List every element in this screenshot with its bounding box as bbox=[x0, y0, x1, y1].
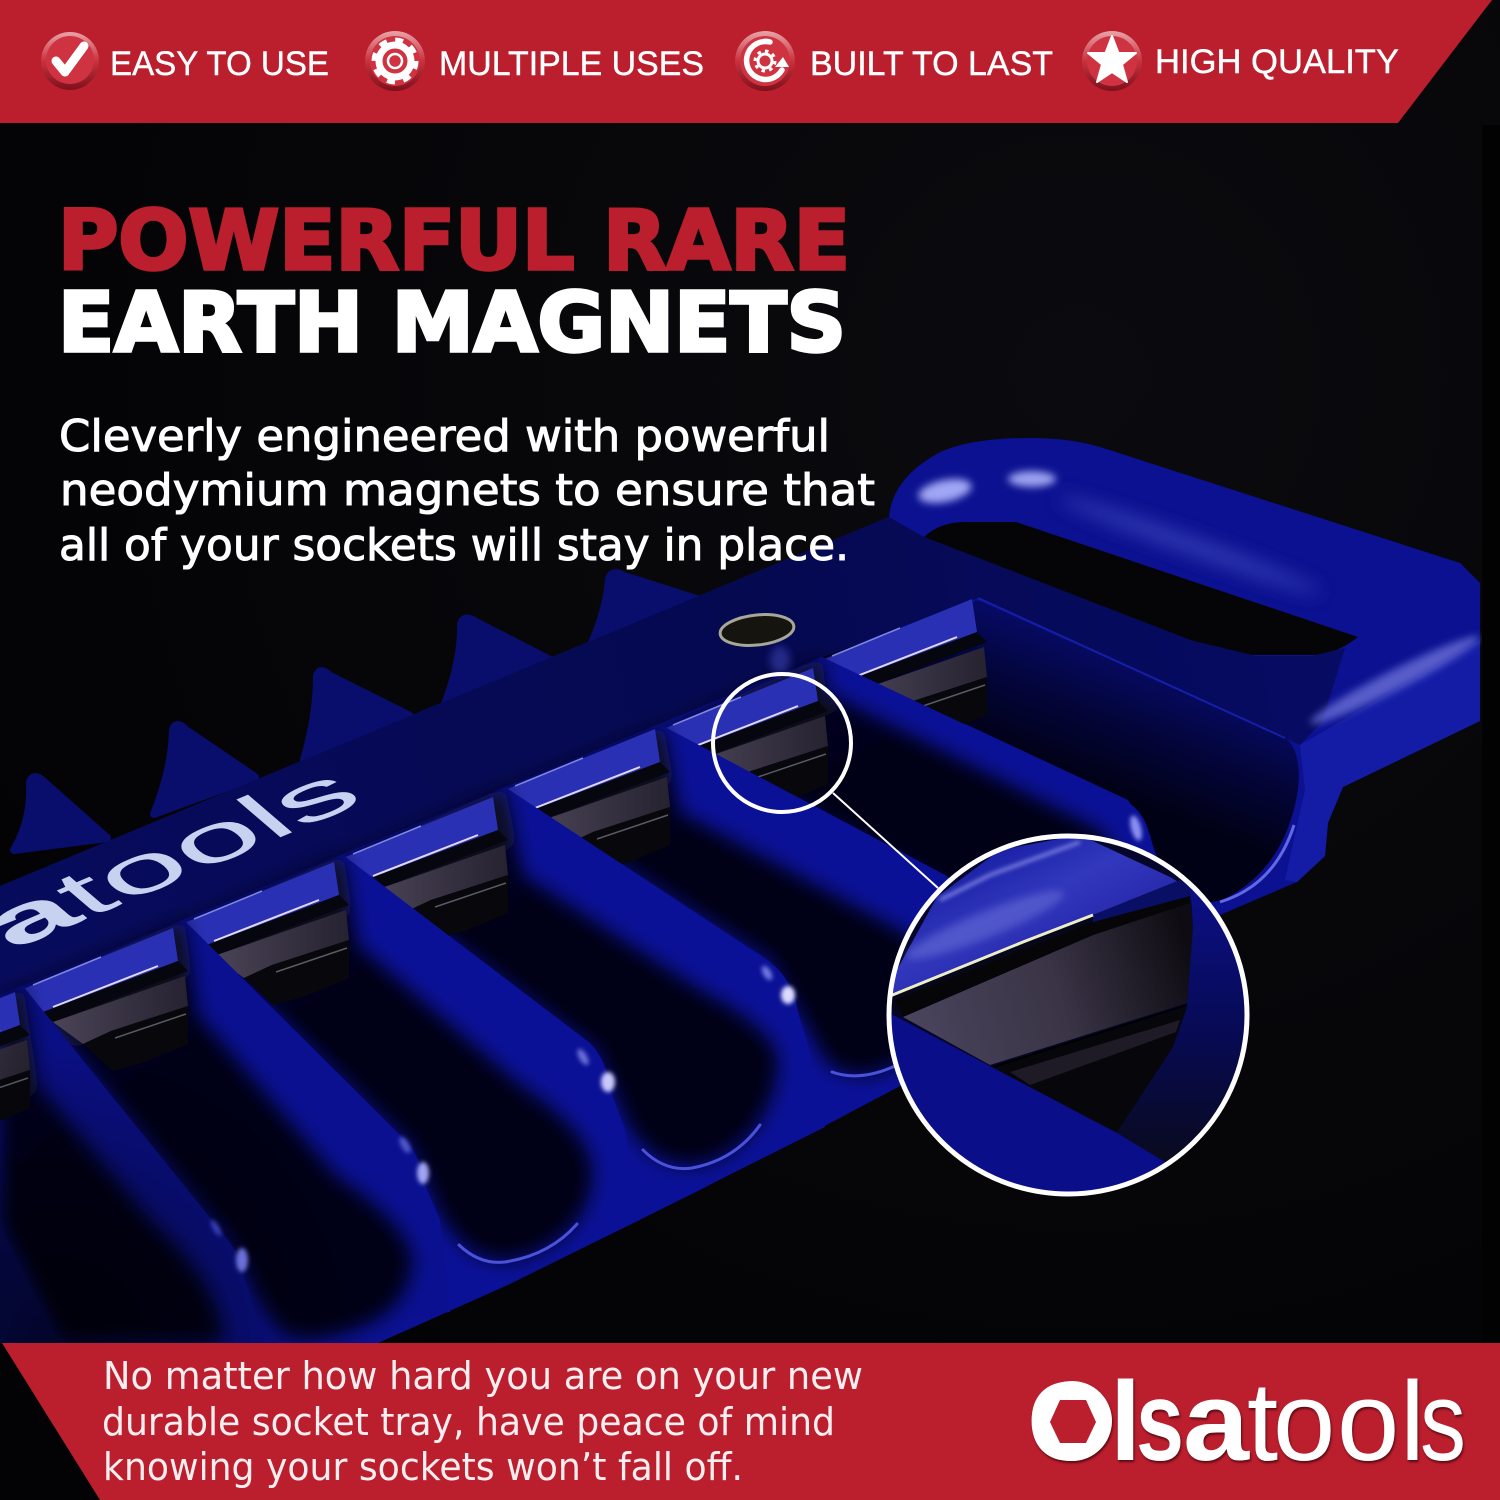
handle highlights bbox=[916, 471, 1484, 882]
body text: neodymium magnets to ensure that bbox=[60, 465, 875, 516]
magnet segment 3 bbox=[505, 729, 670, 872]
label: EASY TO USE bbox=[110, 45, 329, 83]
magnet segment 2 bbox=[663, 668, 828, 811]
tray silhouette bbox=[0, 438, 1480, 1343]
logo letter O with hexagon: O bbox=[1027, 1359, 1114, 1484]
well 6 bbox=[23, 920, 412, 1339]
icon: check mark bbox=[41, 32, 99, 90]
footer text bbox=[102, 1354, 863, 1489]
enlarged: lower magnet layer bbox=[993, 1007, 1187, 1132]
top red banner bbox=[0, 0, 1492, 123]
logo light letter s: s bbox=[1420, 1359, 1466, 1484]
finger tip highlights bbox=[209, 814, 1144, 1272]
footer text: durable socket tray, have peace of mind bbox=[102, 1400, 835, 1444]
finger 5 bbox=[23, 920, 450, 1343]
body text: Cleverly engineered with powerful bbox=[59, 411, 830, 462]
label: HIGH QUALITY bbox=[1155, 43, 1399, 81]
magnet segment 5 bbox=[184, 862, 349, 1005]
logo bold letter s: s bbox=[1136, 1359, 1184, 1484]
icon: gear bbox=[365, 31, 425, 91]
finger 3 bbox=[343, 787, 825, 1237]
heading line 2: EARTH MAGNETS bbox=[58, 276, 846, 371]
callout: connector line bbox=[833, 793, 938, 888]
finger 7 bbox=[0, 1226, 60, 1343]
spine and lower handle bar bbox=[0, 517, 1345, 995]
icon: gear with circular arrow bbox=[735, 31, 795, 91]
well 7 bbox=[0, 986, 222, 1343]
enlarged: magnet face bbox=[903, 903, 1193, 1065]
magnet segment 7 bbox=[0, 992, 30, 1135]
black edge at right of photo bbox=[1482, 125, 1500, 1340]
footer text: No matter how hard you are on your new bbox=[103, 1354, 863, 1398]
enlarged: black strip and glint bbox=[885, 915, 1093, 998]
rim of rightmost well bbox=[978, 598, 1285, 738]
finger 2 bbox=[505, 726, 1002, 1139]
magnet segment 6 bbox=[23, 928, 188, 1071]
finger 4 bbox=[184, 855, 640, 1315]
body text bbox=[59, 411, 875, 571]
finger 6 bbox=[0, 986, 265, 1343]
steel rivet magnet bbox=[719, 611, 795, 674]
finger 1 bbox=[663, 657, 1180, 1032]
shadow over lower left of tray bbox=[0, 1040, 360, 1345]
handle opening bbox=[924, 522, 1358, 655]
footer text: knowing your sockets won’t fall off. bbox=[103, 1445, 743, 1489]
enlarged: blue finger bbox=[892, 1014, 1166, 1192]
logo light letters: tool bbox=[1247, 1359, 1425, 1484]
heading line 1: POWERFUL RARE bbox=[58, 194, 850, 289]
label: BUILT TO LAST bbox=[810, 45, 1053, 83]
logo bold letter a: a bbox=[1183, 1359, 1250, 1484]
logo bold letter l: l bbox=[1110, 1359, 1141, 1484]
magnet segment 1 bbox=[822, 599, 987, 742]
rim highlight: rightmost well bbox=[1220, 825, 1294, 902]
well: rightmost bbox=[822, 600, 1299, 902]
badge: easy to use bbox=[41, 32, 329, 90]
callout: small magnifier circle bbox=[713, 674, 851, 812]
well rim highlights bbox=[459, 1066, 895, 1262]
badge: high quality bbox=[1082, 31, 1399, 91]
badge: built to last bbox=[735, 31, 1053, 91]
magnet segment 4 bbox=[343, 797, 508, 940]
well 2 bbox=[663, 657, 1122, 987]
well 4 bbox=[343, 787, 778, 1165]
enlarged: navy strip bbox=[1093, 880, 1192, 922]
icon: star bbox=[1082, 31, 1142, 91]
well 3 bbox=[505, 726, 945, 1075]
label: MULTIPLE USES bbox=[439, 45, 704, 83]
back teeth of tray bbox=[14, 573, 712, 850]
callout: enlarged magnet view bbox=[880, 830, 1260, 1210]
heading bbox=[58, 194, 850, 371]
enlarged: right wall bbox=[1130, 888, 1244, 1162]
body text: all of your sockets will stay in place. bbox=[59, 520, 849, 571]
enlarged: blue ledge bbox=[880, 835, 1180, 993]
badge: multiple uses bbox=[365, 31, 704, 91]
well 5 bbox=[184, 855, 592, 1260]
brand logo bbox=[1027, 1359, 1466, 1484]
bottom red banner bbox=[2, 1343, 1500, 1500]
